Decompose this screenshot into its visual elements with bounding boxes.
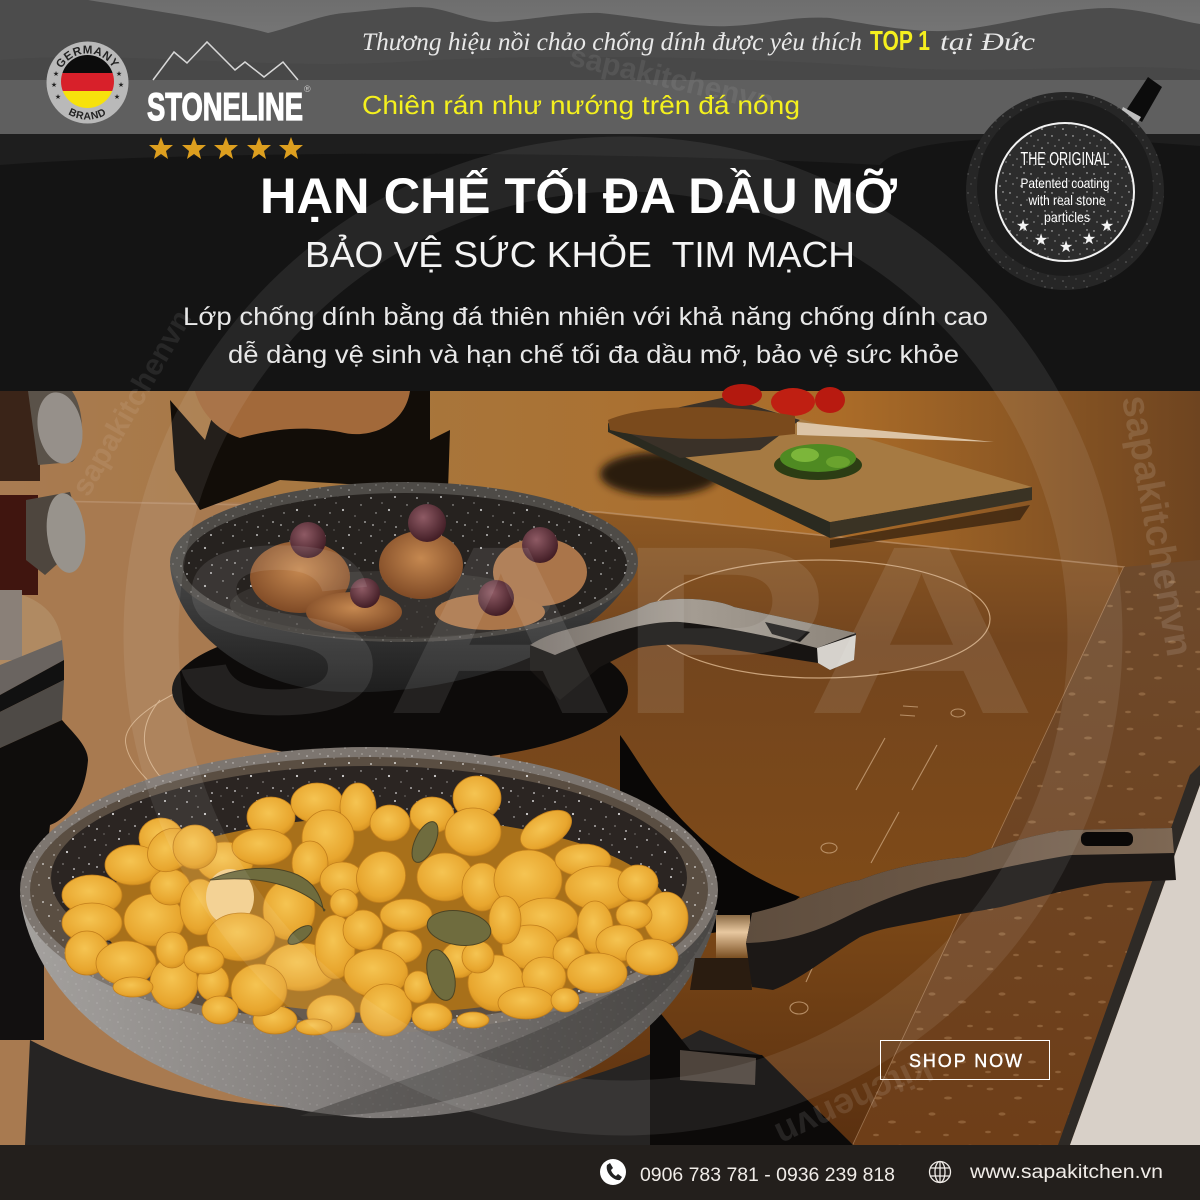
- description text: [183, 302, 988, 369]
- counter and wall: [0, 391, 1200, 1145]
- phone numbers: 0906 783 781 - 0936 239 818: [640, 1165, 895, 1186]
- watermark: SAPA letters: SAPA: [172, 496, 1037, 764]
- icon: phone: [600, 1159, 626, 1185]
- tagline: script line: Thương hiệu nồi chảo chống dính được yêu thích: [362, 29, 862, 56]
- registered mark: ®: [304, 84, 311, 94]
- sage leaves: [210, 818, 493, 1003]
- watermark: sapakitchenvn bottom: kitchenvn: [769, 1048, 939, 1156]
- black hob area under the pans: [25, 618, 853, 1145]
- button: shop now: SHOP NOW: [909, 1051, 1022, 1071]
- footer bar: [0, 1145, 1200, 1200]
- product badge: pan The Original: THE ORIGINAL: [1020, 149, 1110, 169]
- mountain line mark: [153, 42, 298, 80]
- header background: mountain landscape: [0, 0, 1200, 391]
- product badge: pan The Original: with real stone: [1028, 192, 1106, 208]
- description text: Lớp chống dính bằng đá thiên nhiên với khả năng chống dính cao: [183, 302, 988, 331]
- product badge: pan The Original: ★: [1016, 218, 1030, 235]
- product badge: pan The Original: ★: [1082, 231, 1096, 248]
- product badge: pan The Original: ★: [1100, 218, 1114, 235]
- stone worktop: [853, 560, 1200, 1145]
- badge: Germany brand: GERMANY: [56, 46, 120, 67]
- meat patties: [250, 531, 587, 632]
- button: shop now: [880, 1040, 1050, 1080]
- badge: Germany brand: ★: [116, 70, 122, 78]
- subtitle: yellow: Chiên rán như nướng trên đá nóng: [362, 90, 800, 120]
- gnocchi pile: [62, 776, 688, 1036]
- badge: Germany brand: ★: [55, 93, 61, 101]
- watermark: sapakitchenvn right: sapakitchenvn: [1113, 392, 1200, 660]
- tagline: script line: TOP 1: [870, 25, 930, 56]
- watermark: sapakitchenvn left: sapakitchenvn: [65, 305, 198, 502]
- watermark: SAPA ring: [151, 164, 1095, 1108]
- small pan with meat and cherries: [170, 482, 638, 692]
- photo: kitchen hob with two pans: [0, 384, 1200, 1145]
- spice jars and pot: [0, 389, 89, 1040]
- icon: globe: [930, 1161, 950, 1183]
- product badge: pan The Original: [966, 77, 1164, 290]
- white cabinet front: [1070, 785, 1200, 1145]
- heading: HẠN CHẾ TỐI ĐA DẦU MỠ: [260, 167, 897, 224]
- badge: Germany brand: BRAND: [68, 108, 105, 120]
- website: www.sapakitchen.vn: [969, 1162, 1163, 1183]
- pot holder and wood: [170, 391, 450, 510]
- badge: Germany brand: ★: [51, 81, 57, 89]
- product badge: pan The Original: Patented coating: [1020, 175, 1110, 191]
- badge: Germany brand: ★: [53, 70, 59, 78]
- product badge: pan The Original: particles: [1044, 209, 1090, 225]
- description text: dễ dàng vệ sinh và hạn chế tối đa dầu mỡ, bảo vệ sức khỏe: [228, 340, 959, 369]
- german flag circle: [60, 55, 116, 109]
- tagline: script line: [362, 25, 1035, 56]
- product badge: pan The Original: ★: [1034, 232, 1048, 249]
- watermark: sapakitchenvn top: sapakitchenvn: [566, 40, 777, 119]
- large pan black handle: [690, 828, 1176, 990]
- badge: Germany brand: ★: [118, 81, 124, 89]
- cutting board with knife, tomato and herbs: [600, 384, 1032, 548]
- cherries: [290, 504, 558, 616]
- small pan silver handle: [530, 599, 856, 700]
- induction hob glass: [0, 500, 1124, 1145]
- large pan with gnocchi: [20, 747, 718, 1118]
- badge: Germany brand: ★: [114, 93, 120, 101]
- five gold stars: [149, 137, 303, 159]
- translucent header band: [0, 80, 1200, 134]
- wordmark: STONELINE: [147, 86, 303, 129]
- product badge: pan The Original: ★: [1059, 239, 1073, 256]
- subheading: BẢO VỆ SỨC KHỎE TIM MẠCH: [305, 233, 855, 275]
- logo: Stoneline: [147, 42, 311, 129]
- tagline: script line: tại Đức: [940, 29, 1035, 56]
- badge: Germany brand: [46, 42, 128, 124]
- hob controls: [790, 706, 965, 1014]
